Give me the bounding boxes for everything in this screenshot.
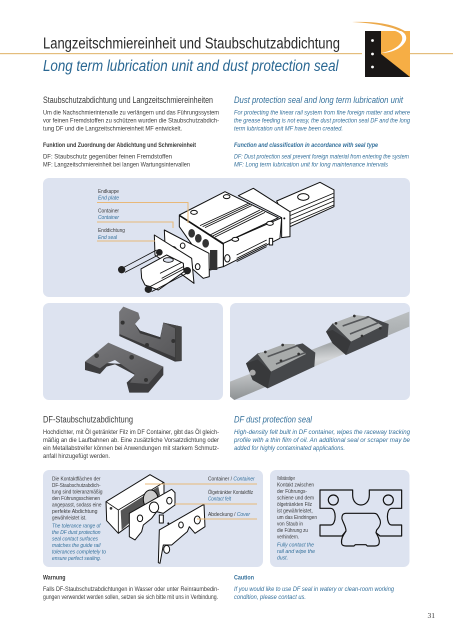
text block: caution English: Caution <box>234 575 254 582</box>
label: end plate: Endkappe <box>98 189 119 195</box>
label: contact felt: Contact felt <box>208 497 231 503</box>
text block: DF English: High-density felt built in DF container, wipes the raceway tracking <box>234 429 410 436</box>
text block: function German: MF: Langzeitschmiereinheit bei langen Wartungsintervallen <box>43 162 190 168</box>
text block: intro English: the grease feeding is not easy, the dust protection seal DF and the long <box>234 118 410 124</box>
label: contact felt: Ölgetränkter Kontaktfilz <box>208 489 253 496</box>
text: tolerance note: The tolerance range of <box>52 524 101 530</box>
label: end seal: Enddichtung <box>98 228 125 234</box>
text block: function German: Funktion und Zuordnung der Abdichtung und Schmiereinheit <box>43 142 197 149</box>
text block: intro German: vor feinen Fremdstoffen zu schützen wurden die Staubschutzabdich- <box>43 118 219 124</box>
heading: DF English: DF dust protection seal <box>234 414 313 424</box>
text: tolerance note <box>52 477 106 562</box>
text block: function English: MF: Long term lubrication unit for long maintenance intervals <box>234 162 389 168</box>
text: contact note: schiene und dem <box>277 496 315 502</box>
text block: intro German: Staubschutzabdichtung und Langzeitschmiereinheiten <box>43 95 213 105</box>
label: end plate: End plate <box>98 196 120 202</box>
text block: DF German: ein Metallabstreifer können bei Anwendungen mit starkem Schmutz- <box>43 445 219 452</box>
text: tolerance note: gewährleistet ist. <box>52 516 86 522</box>
text block: function English: Function and classification in accordance with seal type <box>234 142 378 149</box>
text: contact note: Kontakt zwischen <box>277 482 314 488</box>
text block: warning German: Falls DF-Staubschutzabdichtungen in Wasser oder unter Reinraumbedin- <box>43 586 219 593</box>
text: tolerance note: den Führungsschienen <box>52 496 100 502</box>
text: contact note: um das Eindringen <box>277 515 317 521</box>
label: container: Container <box>98 215 120 221</box>
text: tolerance note: the DF dust protection <box>52 530 101 536</box>
text: tolerance note: tolerances completely to <box>52 550 106 556</box>
title: English: Long term lubrication unit and dust protection seal <box>43 58 339 75</box>
callout lines <box>145 484 257 519</box>
label: end seal: End seal <box>98 235 118 241</box>
text: contact note: rail and wipe the <box>277 549 315 555</box>
text: tolerance note: ensure perfect sealing. <box>52 556 101 562</box>
text: tolerance note: angepasst, sodass eine <box>52 503 102 509</box>
text: tolerance note: matches the guide rail <box>52 543 101 549</box>
drawing: seal profile <box>320 490 402 546</box>
text block: function English <box>234 142 410 168</box>
text: contact note: verhindern. <box>277 534 299 540</box>
drawing: exploded DF seal <box>106 475 205 563</box>
label: contact felt <box>208 489 253 503</box>
text block: function German <box>43 142 197 168</box>
text: contact note: der Führungs- <box>277 489 307 495</box>
callout lines <box>97 202 188 241</box>
panel: DF seal structure <box>43 470 263 567</box>
text block: DF German: Hochdichter, mit Öl getränkter Filz im DF Container, gibt das Öl gleich- <box>43 428 219 436</box>
panel: rail contact profile <box>270 470 410 567</box>
text block: DF English: profile with a thin film of oil. An additional seal or scraper may be <box>233 437 410 444</box>
panel: exploded view <box>43 178 410 297</box>
label: end plate <box>98 189 120 202</box>
text block: function English: DF: Dust protection seal prevent foreign material from entering the system <box>234 154 410 160</box>
text: contact note <box>277 476 317 562</box>
text block: caution English: condition, please contact us. <box>234 594 306 601</box>
drawing: exploded linear guide <box>118 182 334 293</box>
text: contact note: ölgetränkten Filz <box>277 502 312 508</box>
text: contact note: dust. <box>277 556 288 562</box>
text: tolerance note: perfekte Abdichtung <box>52 509 98 515</box>
title: German: Langzeitschmiereinheit und Staubschutzabdichtung <box>43 36 340 52</box>
label: end seal <box>98 228 125 241</box>
text: contact note: ist gewährleistet, <box>277 508 313 514</box>
text: contact note: Fully contact the <box>277 543 314 549</box>
text block: DF German: anfall hinzugefügt werden. <box>43 453 110 460</box>
label: container: Container / Container <box>208 477 256 483</box>
text block: DF German <box>43 428 220 460</box>
text block: function German: DF: Staubschutz gegenüber feinen Fremdstoffen <box>43 154 172 160</box>
rule: header line <box>0 53 453 54</box>
text block: caution English: If you would like to use DF seal in watery or clean-room working <box>234 586 394 593</box>
text block: intro English: Dust protection seal and long term lubrication unit <box>234 95 403 105</box>
heading: DF German: DF-Staubschutzabdichtung <box>43 414 133 424</box>
text: tolerance note: seal contact surfaces <box>52 537 98 543</box>
text block: warning German: gungen verwendet werden sollen, setzen sie sich bitte mit uns in Verbindung. <box>43 594 218 601</box>
text: tolerance note: DF-Staubschutzabdich- <box>52 483 101 489</box>
text block: warning German <box>43 575 219 601</box>
text block: DF German: mäßig an die Laufbahnen ab. Eine zusätzliche Vorsatzdichtung oder <box>43 437 220 444</box>
text: contact note: die Führung zu <box>277 528 308 534</box>
text block: intro German <box>43 95 219 132</box>
text: tolerance note: Die Kontaktflächen der <box>52 477 101 483</box>
icon: company logo <box>352 22 410 77</box>
text block: intro English: For protecting the linear rail system from fine foreign matter and where <box>234 110 410 116</box>
text block: caution English <box>234 575 394 601</box>
text: tolerance note: tung sind toleranzmäßig <box>52 490 103 496</box>
panel: carriages on rail photo <box>230 303 410 400</box>
label: cover: Abdeckung / Cover <box>208 512 251 518</box>
text block: intro German: tung DF und die Langzeitschmiereinheit MF entwickelt. <box>43 126 182 132</box>
text block: DF English: added for highly contaminated applications. <box>234 445 345 452</box>
label: container <box>98 208 120 221</box>
page number: 31 <box>428 611 435 620</box>
text block: intro English: term lubrication unit MF have been created. <box>234 126 343 132</box>
text block: warning German: Warnung <box>43 575 66 582</box>
panel: seal parts photo <box>43 303 223 400</box>
text: contact note: von Staub in <box>277 522 303 528</box>
text block: DF English <box>233 429 410 452</box>
text block: intro English <box>234 95 410 132</box>
text block: intro German: Um die Nachschmierintervalle zu verlängern und das Führungssystem <box>43 110 219 116</box>
text: contact note: Vollständiger <box>277 476 295 482</box>
label: container: Container <box>98 208 119 214</box>
